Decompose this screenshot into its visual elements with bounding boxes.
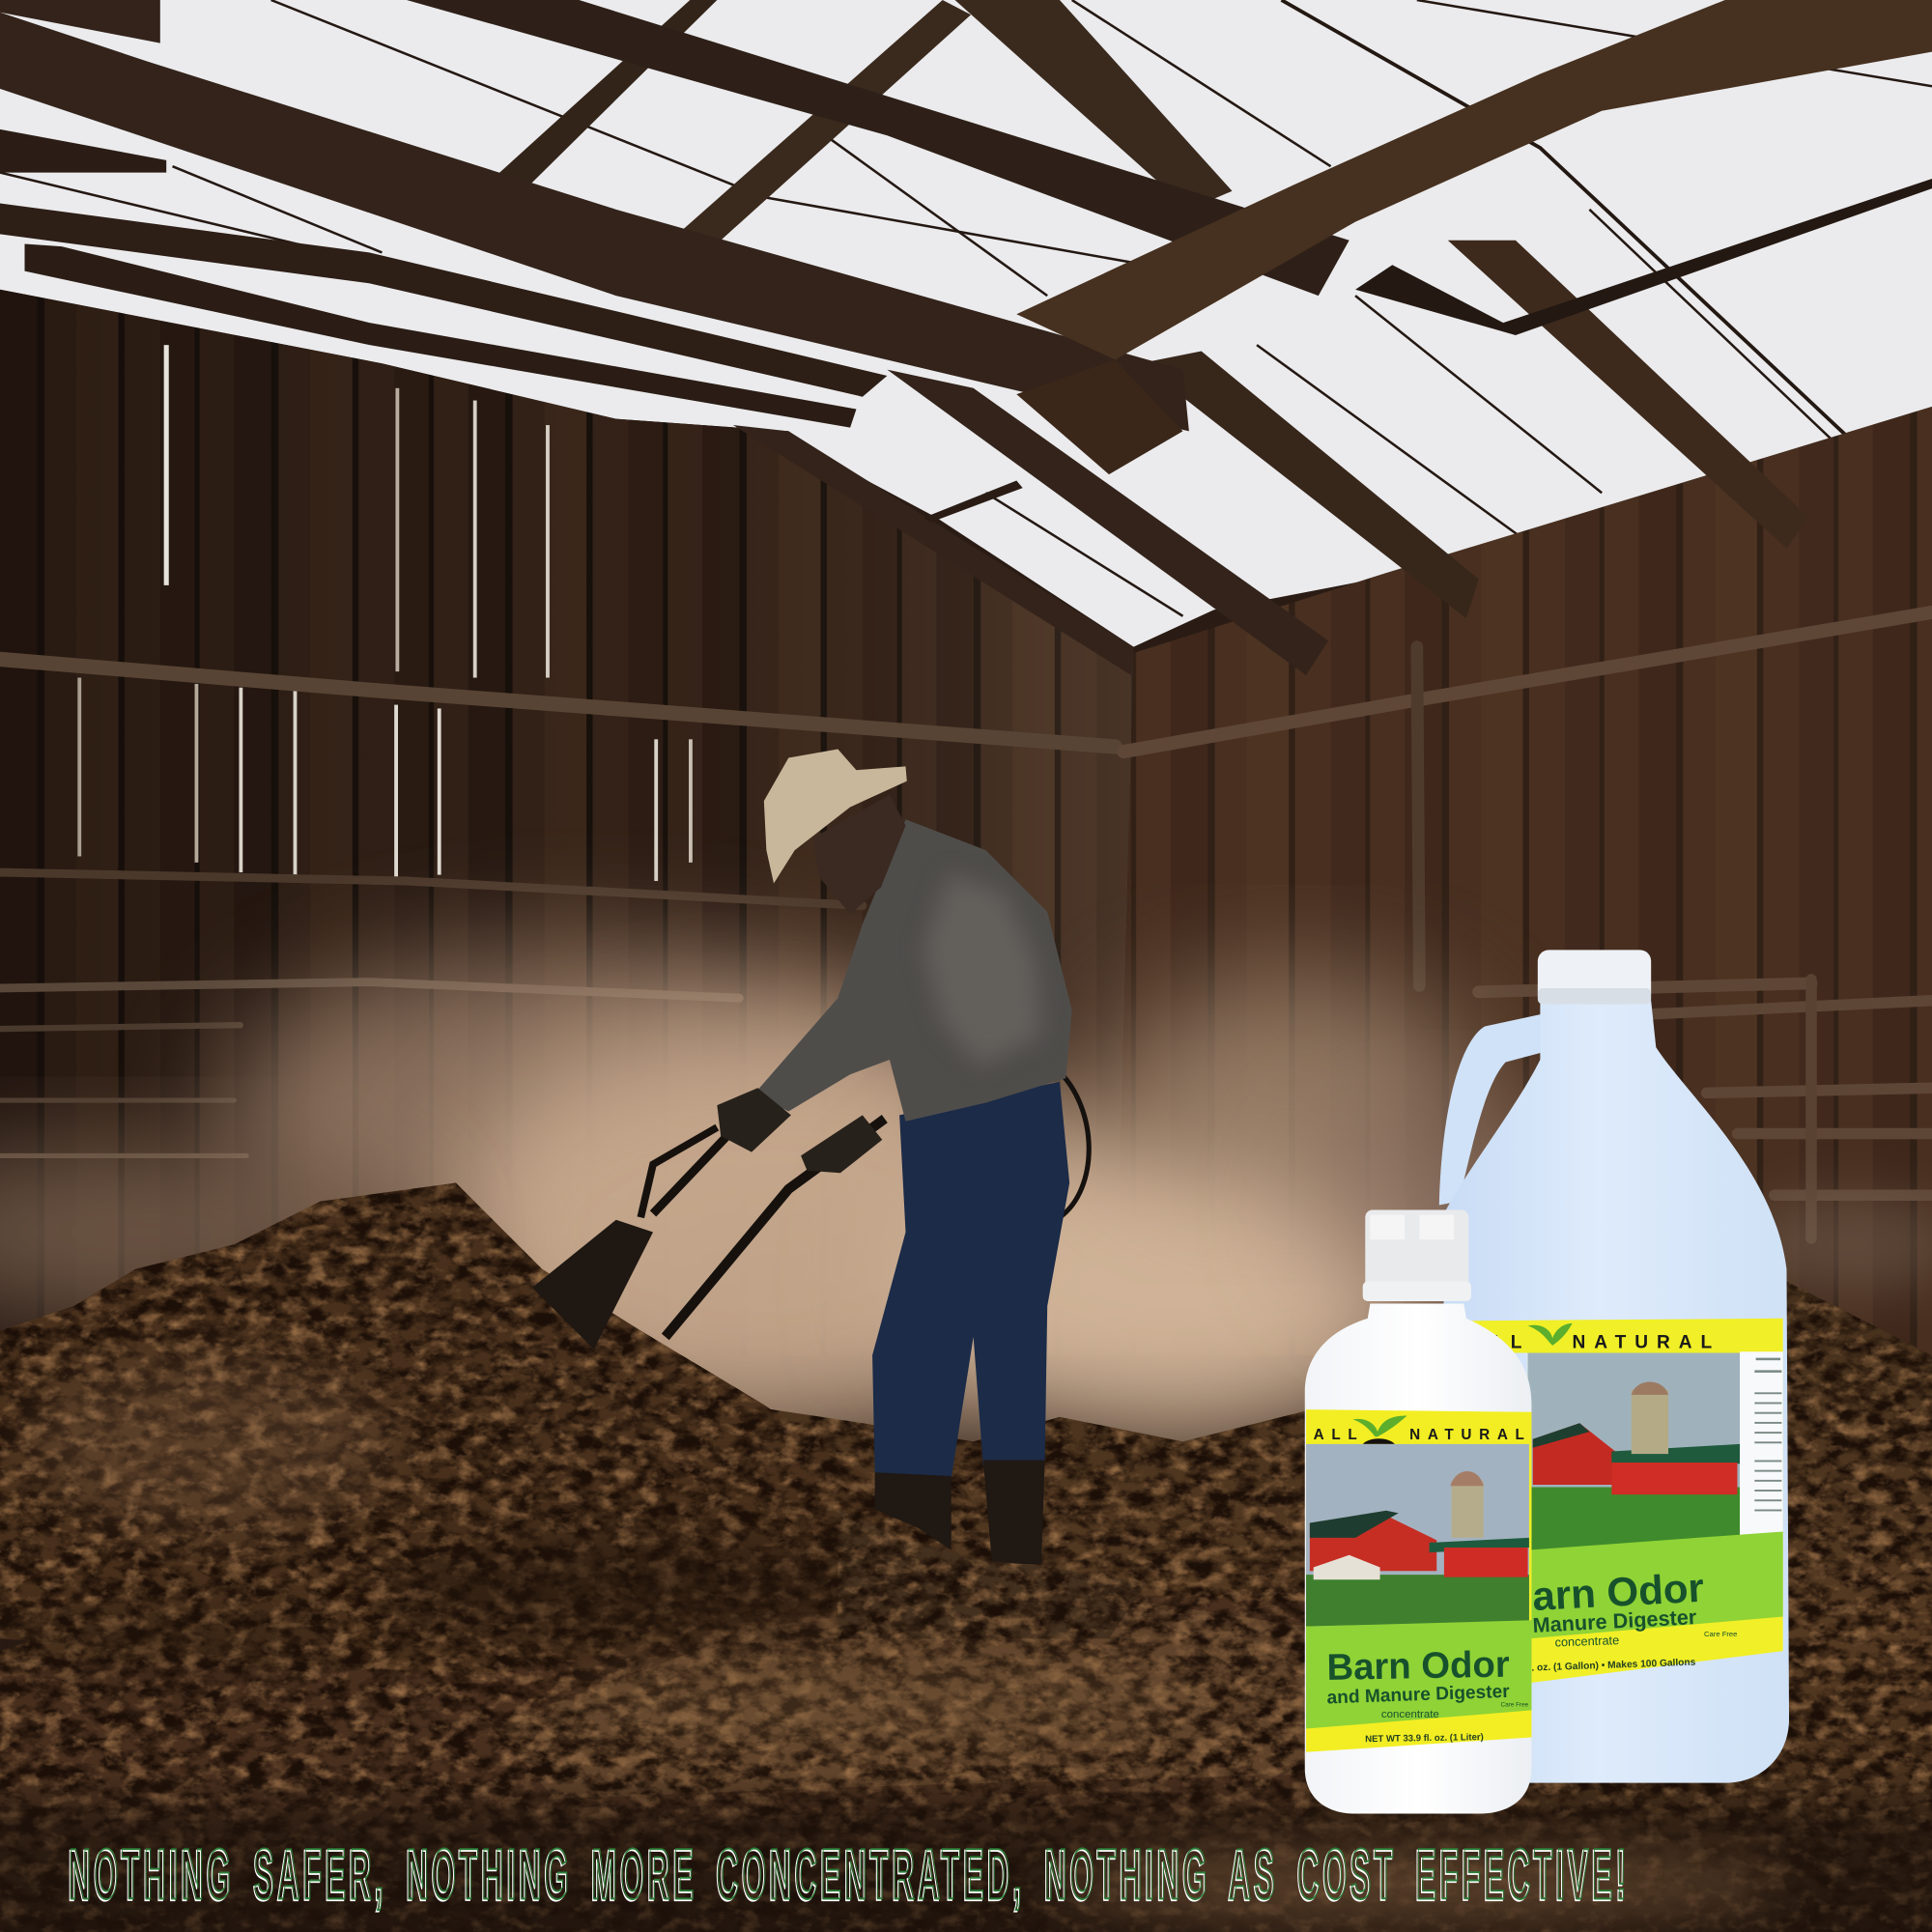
jug cap	[1538, 950, 1651, 1005]
bottle green band	[1306, 1620, 1531, 1729]
wall rails	[0, 612, 1932, 1238]
roof beams	[0, 0, 1932, 675]
jug white text panel	[1740, 1351, 1783, 1544]
jug subtitle: Manure Digester	[1532, 1605, 1697, 1637]
product: one liter bottle	[1305, 1210, 1532, 1814]
jug concentrate: concentrate	[1554, 1633, 1619, 1649]
dust cloud	[0, 949, 1932, 1441]
icon: hose	[1057, 1069, 1089, 1217]
second shovel handle	[666, 1119, 885, 1337]
icon: leaf sprout	[1353, 1416, 1407, 1444]
boots	[875, 1460, 1045, 1565]
jug yellow label	[1466, 1319, 1783, 1683]
farmer with shovels	[532, 750, 1089, 1565]
bottle concentrate: concentrate	[1381, 1709, 1439, 1720]
bottle cap	[1363, 1210, 1471, 1301]
bottle product name: Barn Odor	[1326, 1644, 1510, 1689]
jug net weight: . oz. (1 Gallon) • Makes 100 Gallons	[1531, 1658, 1696, 1674]
manure light and shadow modelling	[0, 1355, 1932, 1932]
bottle yellow label	[1306, 1409, 1531, 1752]
jug brand mark: Care Free	[1704, 1630, 1737, 1638]
roof skylight panels	[0, 0, 1932, 647]
bottle farm photo	[1306, 1444, 1529, 1627]
manure mound in front of boots	[838, 1509, 1146, 1638]
jeans	[872, 1082, 1069, 1479]
shovel handle and blade	[532, 1127, 727, 1350]
face	[813, 795, 906, 914]
jug body	[1441, 1001, 1789, 1783]
jug farm photo	[1528, 1353, 1740, 1552]
product: one liter bottle: NATURAL	[1409, 1427, 1532, 1443]
jug all natural text: ALL	[1474, 1332, 1528, 1352]
bottle all natural text: ALL	[1314, 1427, 1364, 1443]
jug green band	[1528, 1531, 1783, 1638]
bottle subtitle: and Manure Digester	[1326, 1682, 1511, 1708]
brand mark: Care Free	[1501, 1702, 1529, 1709]
bottle net weight: NET WT 33.9 fl. oz. (1 Liter)	[1365, 1732, 1484, 1745]
right barn wall	[1109, 407, 1932, 1368]
hat	[764, 750, 907, 884]
gloves	[717, 1088, 882, 1173]
jug handle	[1439, 1012, 1548, 1205]
torso	[754, 819, 1072, 1122]
bottle body	[1305, 1303, 1531, 1814]
product: one gallon jug: NATURAL	[1573, 1332, 1720, 1352]
torso highlight	[924, 875, 1041, 1065]
icon: jug leaf sprout	[1528, 1323, 1573, 1346]
left barn wall	[0, 283, 1140, 1368]
product: one gallon jug	[1439, 950, 1789, 1783]
manure ground and pile	[0, 1182, 1932, 1932]
jug product name: arn Odor	[1531, 1565, 1705, 1619]
